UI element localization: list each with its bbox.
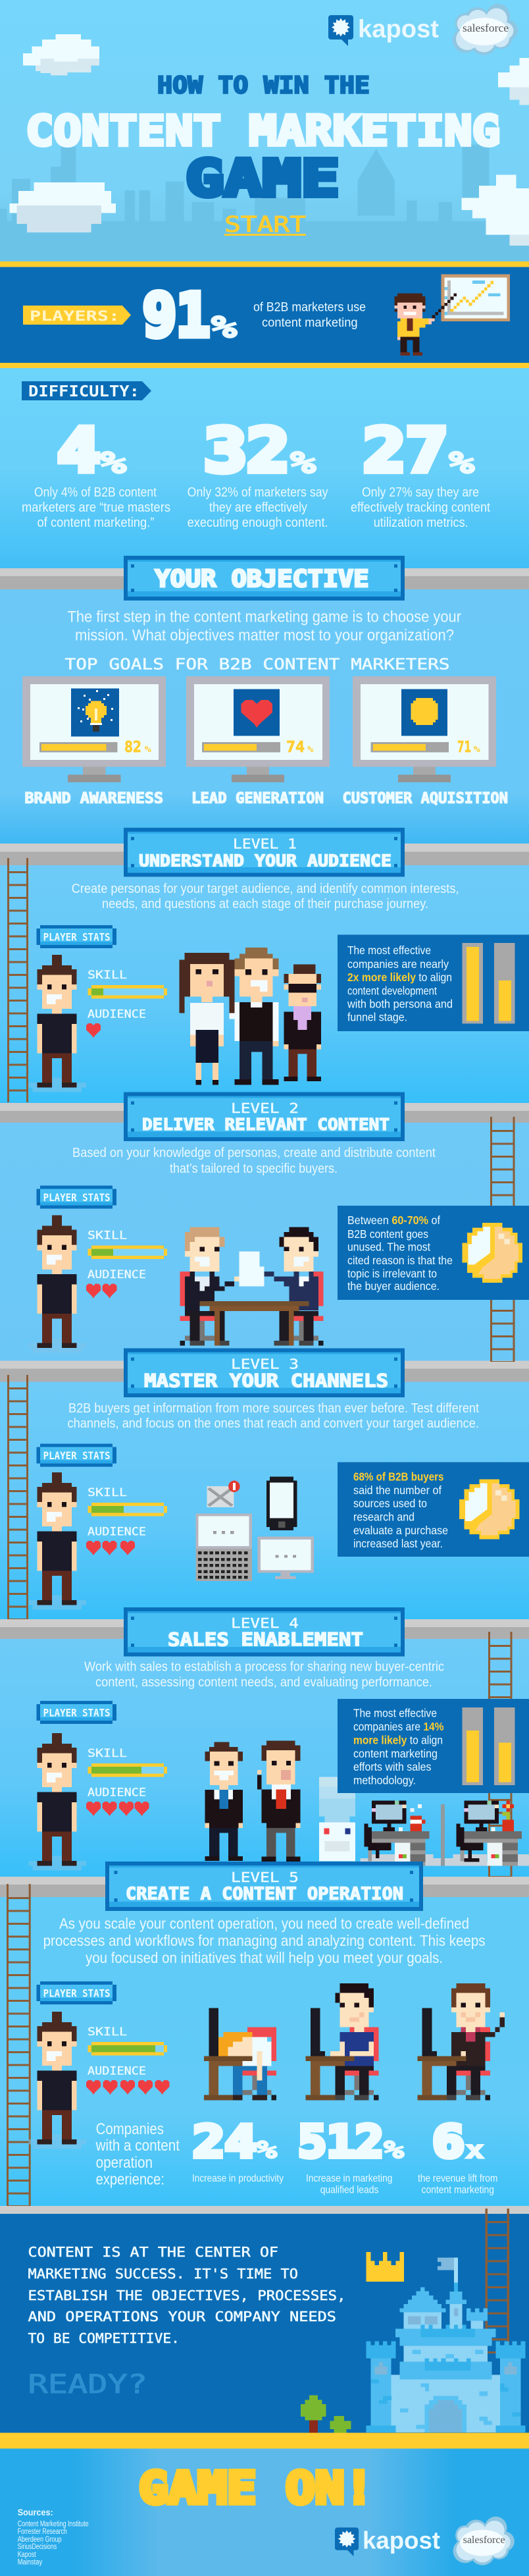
goal labels	[25, 790, 508, 807]
skill and audience: level 2: SKILL	[88, 1229, 127, 1242]
stat: 6 times: 6	[432, 2116, 465, 2168]
stat: 32 percent: %	[290, 445, 316, 481]
panel: level 5 heading: CREATE A CONTENT OPERATION	[126, 1884, 403, 1904]
callout: level 2: the buyer audience.	[347, 1279, 440, 1293]
stat: 24 percent: %	[257, 2136, 278, 2164]
bar chart: two columns	[462, 943, 515, 1024]
monitor: lead generation: %	[307, 745, 315, 754]
players description: content marketing	[262, 316, 358, 330]
skill and audience: level 3: SKILL	[88, 1486, 127, 1499]
stat: 4 percent: %	[100, 445, 126, 481]
bar chart: two columns	[462, 1707, 515, 1785]
callout: level 1: with both persona and	[347, 997, 453, 1010]
callout: level 4: companies are 14%	[353, 1720, 444, 1733]
icon: light bulb	[71, 689, 119, 736]
stat: 4 percent: 4	[57, 416, 100, 486]
level 5 paragraph: you focused on initiatives that will help you meet your goals.	[86, 1949, 443, 1966]
progress bar: 82 percent	[39, 742, 117, 752]
illustration: two people at a table	[180, 1227, 324, 1345]
section background: difficulty	[0, 368, 529, 568]
title	[26, 72, 500, 208]
city skyline	[0, 145, 529, 261]
player stats: level 3	[36, 1444, 116, 1467]
callout: level 3: evaluate a purchase	[353, 1524, 448, 1537]
skill and audience: level 4: SKILL	[88, 1747, 127, 1759]
panel: level 1 heading	[124, 828, 405, 877]
platforms	[0, 568, 529, 1897]
pie chart	[459, 1479, 520, 1539]
callout: level 3: sources used to	[353, 1497, 427, 1510]
icon: smartphone	[266, 1476, 297, 1530]
panel: level 1 heading: UNDERSTAND YOUR AUDIENCE	[139, 851, 391, 870]
callout: level 3: said the number of	[353, 1484, 441, 1497]
panel: level 2 heading: LEVEL 2	[231, 1100, 299, 1116]
companies label: operation	[96, 2154, 153, 2172]
player stats: level 5: PLAYER STATS	[43, 1987, 111, 1999]
stat: 27 percent: effectively tracking content	[351, 500, 490, 515]
callout: level 1: funnel stage.	[347, 1010, 407, 1023]
stat: 4 percent: of content marketing.”	[37, 516, 154, 530]
stat: 6 times: x	[465, 2136, 484, 2164]
panel: your objective heading	[124, 556, 405, 601]
closing message: TO BE COMPETITIVE.	[28, 2330, 180, 2346]
companies label: with a content	[95, 2137, 180, 2155]
stat: 512 percent: %	[384, 2136, 405, 2164]
sources: Mainstay	[18, 2559, 42, 2567]
stat: 27 percent	[351, 416, 490, 530]
callout: level 2: unused. The most	[347, 1241, 430, 1254]
stat: 512 percent: 512	[298, 2116, 384, 2168]
goal labels: CUSTOMER AQUISITION	[342, 790, 508, 807]
title: HOW TO WIN THE	[157, 72, 370, 99]
panel: players band	[0, 261, 529, 368]
callout: level 2: topic is irrelevant to	[347, 1267, 437, 1280]
goals heading: TOP GOALS FOR B2B CONTENT MARKETERS	[64, 656, 450, 673]
players tag	[23, 306, 131, 325]
difficulty tag	[22, 381, 151, 400]
callout: level 3	[338, 1462, 529, 1557]
ladder: level 5	[7, 1884, 31, 2206]
illustration: three personas	[179, 948, 321, 1085]
callout: level 4: methodology.	[353, 1774, 416, 1787]
callout: level 4: content marketing	[353, 1747, 438, 1760]
skill and audience: level 4	[86, 1747, 167, 1816]
goal labels: BRAND AWARENESS	[25, 790, 163, 807]
player stats: level 4	[36, 1701, 116, 1724]
stat: 32 percent: Only 32% of marketers say	[188, 485, 328, 500]
salesforce logo bottom: salesforce	[463, 2535, 505, 2546]
icon: heart	[234, 689, 280, 736]
skill and audience: level 5: SKILL	[88, 2026, 127, 2038]
section background: level 1	[0, 865, 529, 1103]
callout: level 1: content development	[347, 984, 437, 998]
title: CONTENT MARKETING	[26, 107, 500, 155]
closing message: MARKETING SUCCESS. IT'S TIME TO	[28, 2266, 298, 2282]
player stats: level 2: PLAYER STATS	[43, 1191, 111, 1204]
illustration: two salesmen	[205, 1741, 300, 1862]
stat: 32 percent	[188, 416, 328, 530]
closing message: ESTABLISH THE OBJECTIVES, PROCESSES,	[28, 2288, 346, 2303]
salesforce logo bottom	[453, 2517, 515, 2565]
sources	[18, 2507, 89, 2567]
stat: 27 percent: %	[449, 445, 474, 481]
panel: level 1 heading: LEVEL 1	[233, 836, 297, 852]
icon: laptop	[195, 1513, 252, 1581]
salesforce logo top	[453, 4, 518, 55]
monitor: lead generation	[186, 676, 330, 782]
ladder: level 4	[488, 1632, 512, 1877]
stat: 6 times	[418, 2116, 497, 2196]
ladder: level 1	[7, 858, 28, 1102]
players tag: PLAYERS:	[30, 308, 120, 324]
level 1 paragraph: needs, and questions at each stage of their purchase journey.	[102, 897, 428, 911]
salesforce logo top: salesforce	[463, 22, 509, 34]
panel: footer	[0, 2448, 529, 2576]
kapost logo bottom: kapost	[363, 2527, 440, 2554]
91 percent stat: %	[211, 309, 237, 345]
player stats: level 5	[36, 1981, 116, 2004]
player character: level 3	[29, 1472, 86, 1610]
stat: 32 percent: 32	[204, 416, 290, 486]
level 4 paragraph: Work with sales to establish a process for sharing new buyer-centric	[84, 1660, 444, 1675]
ladder: level 2	[490, 1117, 515, 1362]
ladder: closing	[486, 2209, 509, 2371]
stat: 24 percent: Increase in productivity	[192, 2173, 284, 2184]
stat: 27 percent: 27	[363, 416, 448, 486]
skill and audience: level 1: SKILL	[88, 969, 127, 981]
panel: level 5 heading: LEVEL 5	[231, 1869, 299, 1885]
stat: 4 percent: marketers are “true masters	[22, 500, 170, 515]
callout: level 4: more likely to align	[353, 1733, 443, 1746]
player character: level 1	[29, 955, 86, 1092]
companies label: experience:	[96, 2170, 164, 2189]
illustration: office desks	[360, 1800, 529, 1865]
monitor: brand awareness: 82	[124, 739, 141, 756]
header background	[0, 0, 529, 261]
panel: level 4 heading: LEVEL 4	[231, 1615, 299, 1631]
worker at desk: navy shirt	[306, 1983, 378, 2100]
monitor: lead generation: 74	[286, 739, 305, 756]
stat: 6 times: content marketing	[421, 2185, 494, 2196]
level 1 paragraph: Create personas for your target audience, and identify common interests,	[72, 882, 459, 896]
skill and audience: level 5: AUDIENCE	[88, 2065, 146, 2077]
callout: level 2: Between 60-70% of	[347, 1214, 440, 1227]
player character: level 4	[29, 1733, 86, 1871]
level 5 paragraph: As you scale your content operation, you need to create well-defined	[59, 1915, 469, 1932]
stat: 6 times: the revenue lift from	[418, 2173, 497, 2184]
callout: level 3: research and	[353, 1511, 415, 1524]
section background: objective	[0, 589, 529, 844]
illustration: three workers at desks	[204, 1983, 505, 2100]
level 5 paragraph: processes and workflows for managing and analyzing content. This keeps	[43, 1932, 486, 1949]
panel: level 3 heading: MASTER YOUR CHANNELS	[144, 1370, 388, 1391]
section background: level 5	[0, 1897, 529, 2206]
panel: level 4 heading	[124, 1607, 405, 1657]
level 2 paragraph: that’s tailored to specific buyers.	[170, 1162, 338, 1176]
panel: level 3 heading: LEVEL 3	[231, 1356, 299, 1372]
panel: closing band	[0, 2206, 529, 2448]
icon: envelope	[207, 1481, 240, 1507]
illustration: water cooler	[319, 1777, 355, 1862]
skill and audience: level 3: AUDIENCE	[88, 1525, 146, 1538]
sources: SiriusDecisions	[18, 2543, 57, 2551]
player stats: level 1: PLAYER STATS	[43, 931, 111, 943]
callout: level 1: companies are nearly	[347, 957, 449, 971]
skill and audience: level 2	[86, 1229, 167, 1299]
stat: 4 percent: Only 4% of B2B content	[34, 485, 157, 500]
monitor: brand awareness: %	[145, 745, 152, 754]
title: GAME	[186, 150, 340, 208]
cloud: lower left	[9, 182, 116, 232]
monitor: customer acquisition	[353, 676, 496, 782]
level 3 paragraph: channels, and focus on the ones that reach and convert your target audience.	[67, 1416, 479, 1431]
stat: 4 percent	[22, 416, 170, 530]
stat: 27 percent: Only 27% say they are	[362, 485, 479, 500]
companies label	[95, 2120, 180, 2189]
stat: 512 percent: qualified leads	[320, 2185, 378, 2196]
sources: Forrester Research	[18, 2528, 67, 2536]
panel: level 4 heading: SALES ENABLEMENT	[168, 1628, 363, 1650]
progress bar: 74 percent	[202, 742, 280, 752]
stat: 32 percent: executing enough content.	[188, 516, 328, 530]
panel: level 5 heading	[105, 1862, 423, 1911]
callout: level 4	[338, 1699, 529, 1793]
closing message	[28, 2244, 346, 2346]
icon: coin	[401, 689, 447, 736]
stat: 27 percent: utilization metrics.	[374, 516, 468, 530]
objective paragraph: The first step in the content marketing game is to choose your	[67, 608, 461, 626]
stat: 24 percent	[192, 2116, 284, 2184]
section background: level 2	[0, 1123, 529, 1361]
stat: 32 percent: they are effectively	[209, 500, 307, 515]
stat: 512 percent	[298, 2116, 405, 2196]
sources: Aberdeen Group	[18, 2536, 62, 2544]
worker at desk: raising hand	[417, 1983, 505, 2100]
callout: level 2: cited reason is that the	[347, 1254, 453, 1267]
panel: level 2 heading: DELIVER RELEVANT CONTENT	[142, 1115, 390, 1134]
icon: crown and castle	[366, 2252, 525, 2432]
kapost logo top: kapost	[358, 16, 439, 43]
callout: level 2: B2B content goes	[347, 1227, 428, 1241]
player character: level 2	[29, 1216, 86, 1353]
stat: 512 percent: Increase in marketing	[306, 2173, 392, 2184]
goal labels: LEAD GENERATION	[191, 790, 324, 807]
cloud: top left	[23, 34, 99, 75]
level 3 paragraph: B2B buyers get information from more sources than ever before. Test different	[68, 1401, 479, 1416]
callout: level 4: efforts with sales	[353, 1760, 432, 1773]
91 percent stat: 91	[143, 281, 210, 350]
ready prompt: READY?	[28, 2370, 147, 2400]
illustration: devices and email	[195, 1476, 314, 1581]
worker asleep at desk	[204, 2008, 276, 2100]
player stats: level 2	[36, 1185, 116, 1209]
icon: tree and bush	[301, 2395, 351, 2432]
skill and audience: level 3	[86, 1486, 167, 1555]
game on heading: GAME ON!	[139, 2463, 374, 2514]
callout: level 2	[338, 1206, 529, 1300]
level 4 paragraph: content, assessing content needs, and evaluating performance.	[95, 1675, 432, 1690]
closing message: AND OPERATIONS YOUR COMPANY NEEDS	[28, 2309, 336, 2324]
stat: 24 percent: 24	[193, 2116, 257, 2168]
level 5 paragraph	[43, 1915, 486, 1966]
players description	[253, 301, 366, 330]
skill and audience: level 1: AUDIENCE	[88, 1007, 146, 1021]
monitor: customer acquisition: 71	[457, 739, 471, 756]
panel: level 3 heading	[124, 1348, 405, 1397]
icon: desktop monitor	[257, 1537, 314, 1579]
sources: Sources:	[18, 2507, 53, 2517]
icon: presenter and chart	[394, 275, 510, 356]
sources: Kapost	[18, 2551, 36, 2559]
player character: level 5	[29, 2012, 86, 2149]
ladder: level 3	[7, 1375, 28, 1619]
panel: level 2 heading	[124, 1092, 405, 1141]
objective paragraph: mission. What objectives matter most to your organization?	[75, 627, 454, 644]
callout: level 1: 2x more likely to align	[347, 971, 452, 984]
players description: of B2B marketers use	[253, 301, 366, 315]
callout: level 1	[338, 935, 529, 1031]
kapost logo bottom	[335, 2527, 440, 2556]
cloud: top right	[498, 58, 529, 105]
callout: level 3: 68% of B2B buyers	[353, 1470, 444, 1484]
objective paragraph	[67, 608, 461, 644]
monitor: brand awareness	[22, 676, 166, 782]
player stats: level 1	[36, 925, 116, 948]
level 1 paragraph	[72, 882, 459, 911]
level 4 paragraph	[84, 1660, 444, 1690]
callout: level 1: The most effective	[347, 944, 431, 957]
callout: level 3: increased last year.	[353, 1537, 443, 1550]
skill and audience: level 1	[86, 969, 167, 1038]
start link: START	[224, 211, 306, 237]
panel: your objective heading: YOUR OBJECTIVE	[155, 566, 368, 593]
cloud: lower right	[462, 174, 529, 246]
section background: level 3	[0, 1382, 529, 1619]
monitor: customer acquisition: %	[474, 745, 481, 754]
skill and audience: level 5	[86, 2026, 170, 2095]
level 2 paragraph	[72, 1146, 436, 1176]
skill and audience: level 4: AUDIENCE	[88, 1786, 146, 1799]
callout: level 4: The most effective	[353, 1707, 437, 1720]
kapost logo top	[328, 15, 439, 46]
player stats: level 4: PLAYER STATS	[43, 1707, 111, 1719]
difficulty tag: DIFFICULTY:	[28, 383, 139, 400]
pie chart	[462, 1223, 522, 1283]
player stats: level 3: PLAYER STATS	[43, 1449, 111, 1462]
closing message: CONTENT IS AT THE CENTER OF	[28, 2244, 278, 2260]
section background: level 4	[0, 1639, 529, 1877]
progress bar: 71 percent	[371, 742, 449, 752]
level 2 paragraph: Based on your knowledge of personas, create and distribute content	[72, 1146, 436, 1160]
companies label: Companies	[96, 2120, 164, 2138]
sources: Content Marketing Institute	[18, 2521, 89, 2529]
skill and audience: level 2: AUDIENCE	[88, 1268, 146, 1281]
level 3 paragraph	[67, 1401, 479, 1431]
